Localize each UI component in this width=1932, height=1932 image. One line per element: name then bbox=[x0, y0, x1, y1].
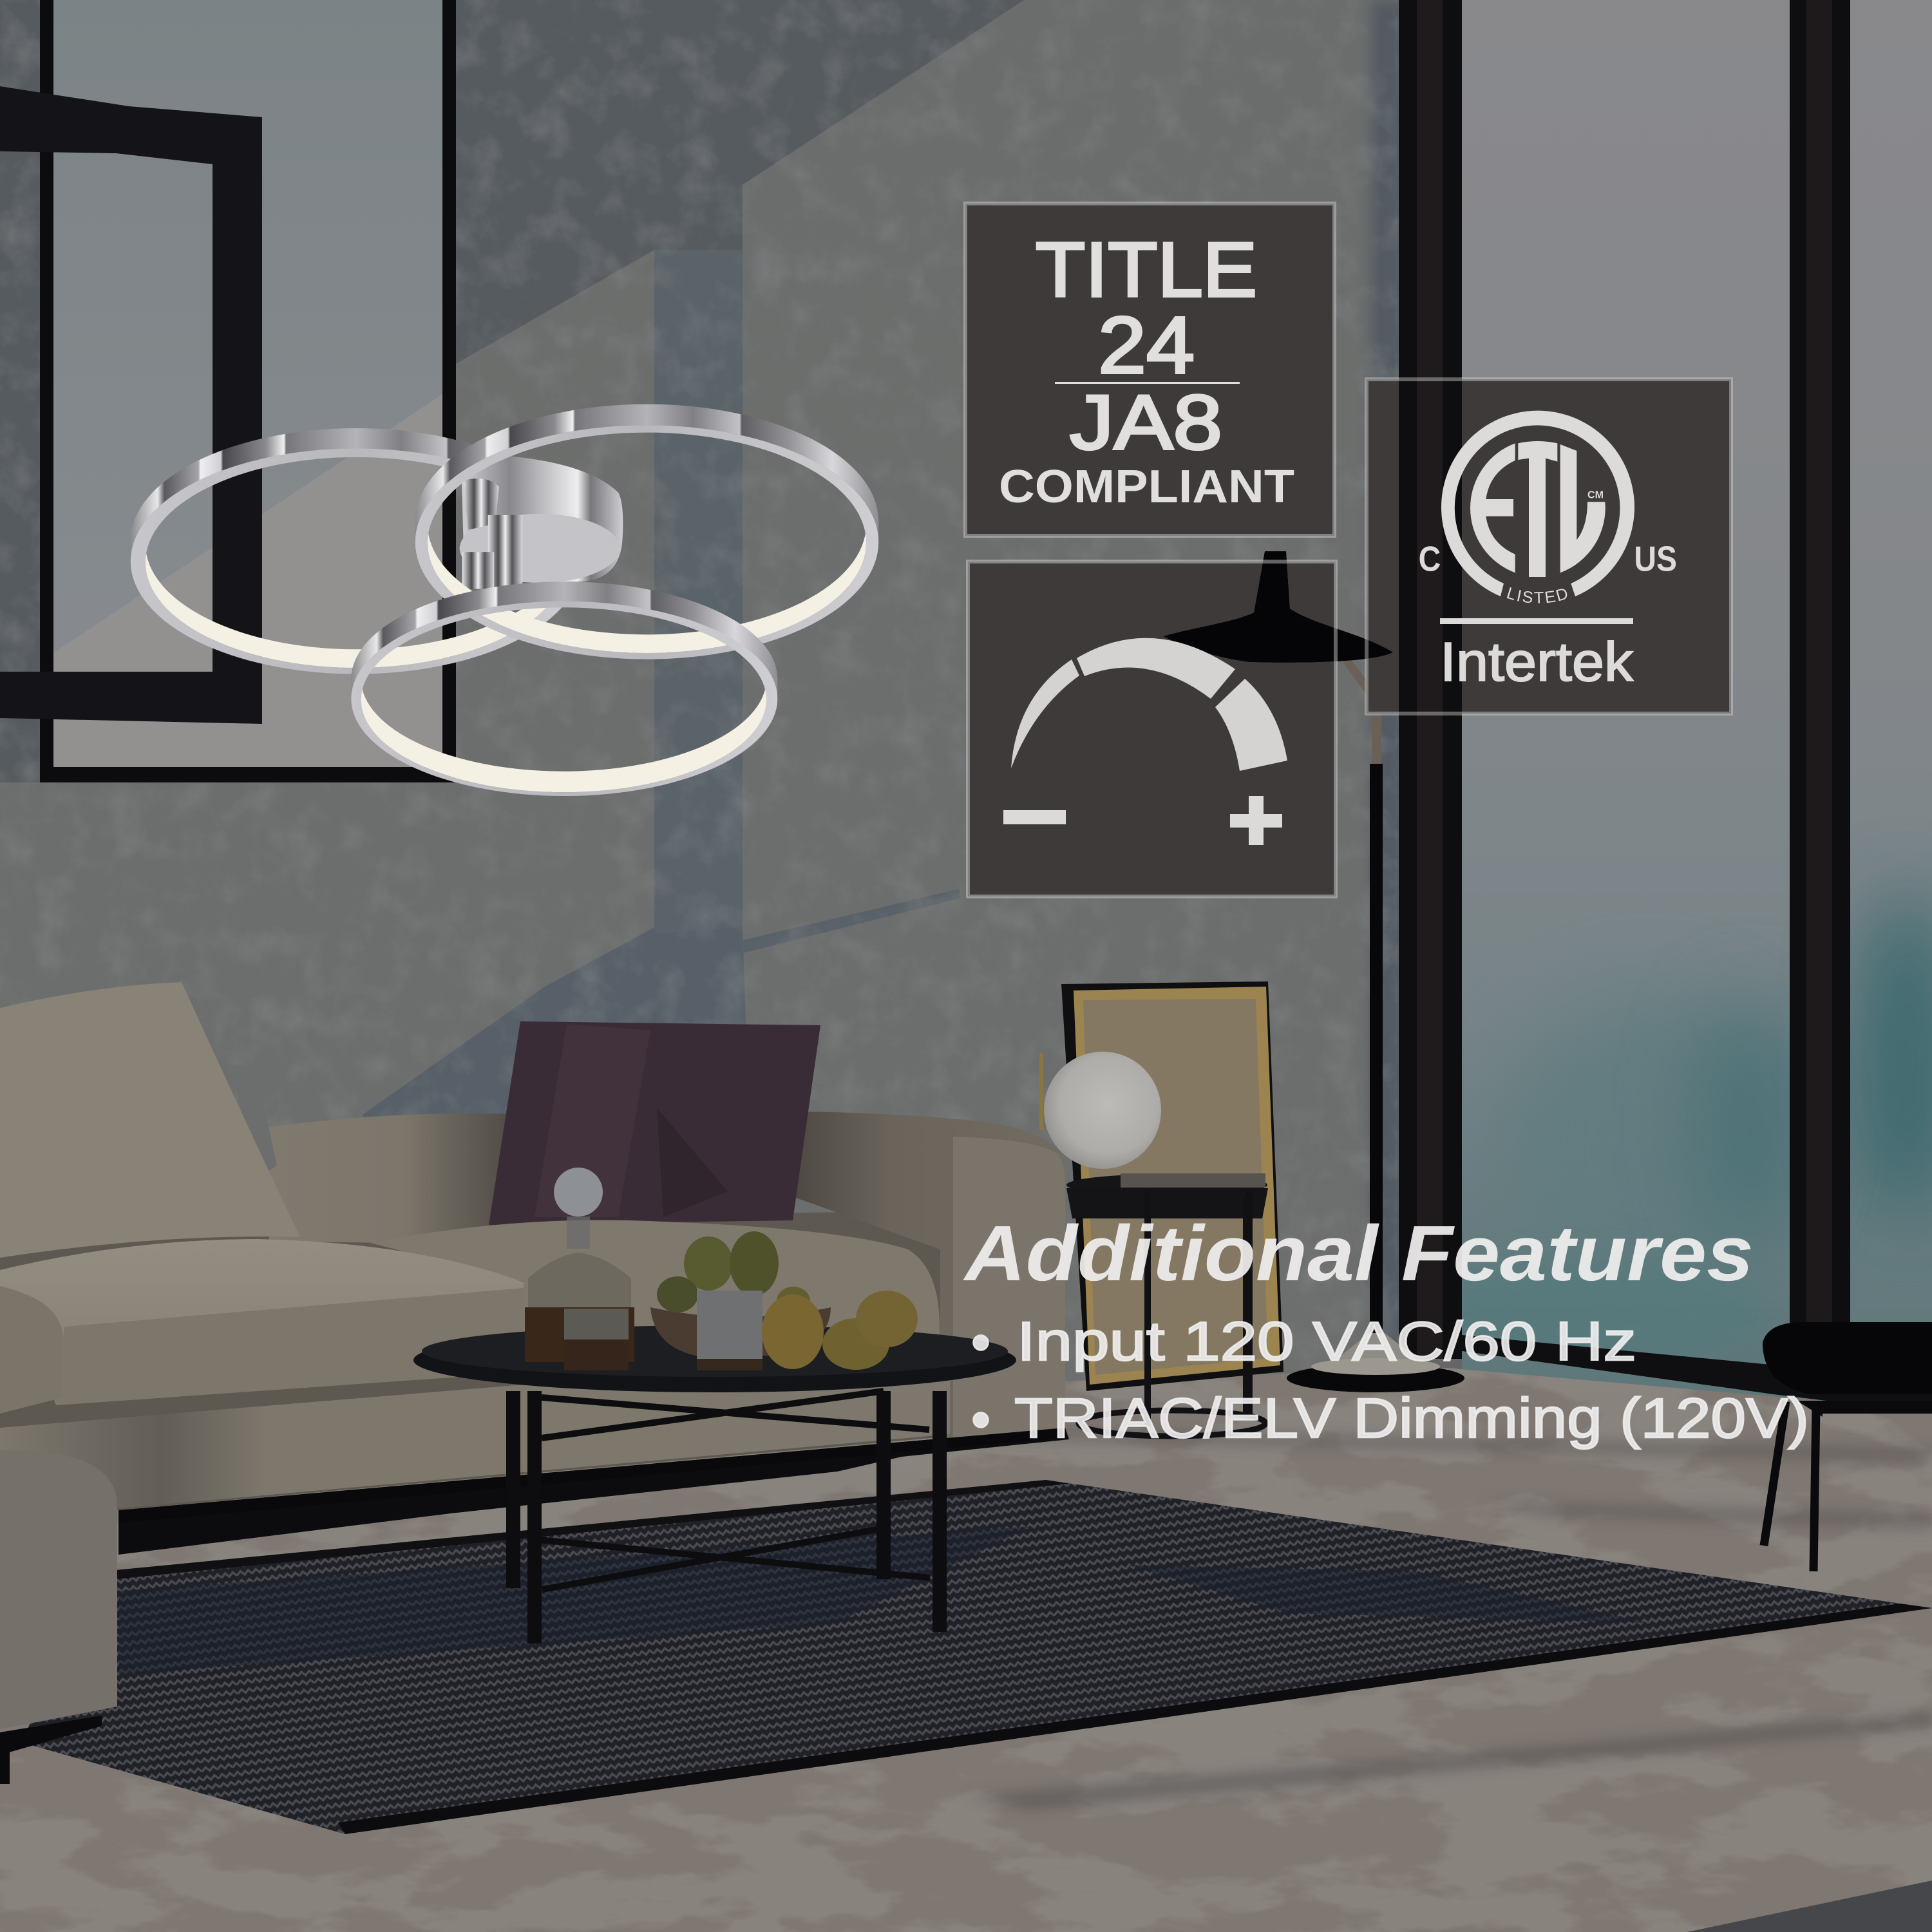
black rail bbox=[118, 1428, 1065, 1523]
icon: plus bbox=[1230, 796, 1282, 845]
sofa base bbox=[0, 1368, 950, 1508]
pears bbox=[657, 1231, 810, 1315]
large beige pillow bbox=[0, 982, 300, 1258]
heading: Additional Features: Additional Features bbox=[963, 1209, 1754, 1297]
rug bbox=[20, 1480, 1932, 1834]
badge text: TITLE: TITLE bbox=[1036, 227, 1257, 313]
badge text: COMPLIANT: COMPLIANT bbox=[999, 461, 1294, 513]
sofa bbox=[0, 982, 1069, 1784]
window panes with misty forest bbox=[1462, 0, 1932, 1401]
list item: dimming: TRIAC/ELV Dimming (120V) bbox=[1014, 1387, 1809, 1450]
chandelier: three chrome LED rings bbox=[131, 404, 878, 796]
leaning canvas bbox=[1061, 981, 1283, 1391]
left seat cushion bbox=[0, 1239, 524, 1405]
tray bbox=[413, 1325, 1016, 1392]
badge text: Intertek: Intertek bbox=[1440, 632, 1634, 693]
right seat cushion bbox=[370, 1220, 940, 1378]
panel: Title 24 JA8 compliant badge bbox=[965, 204, 1334, 536]
panel: dimmable badge bbox=[968, 562, 1336, 896]
icon: ETL logo: CM bbox=[1587, 489, 1604, 500]
icon: minus bbox=[1003, 810, 1066, 824]
small grey pillow bbox=[231, 1065, 277, 1179]
background: concrete wall bbox=[0, 0, 1417, 1481]
right arm bbox=[796, 1112, 1065, 1446]
list item: input: • bbox=[971, 1312, 990, 1373]
front-left arm bbox=[0, 1450, 117, 1784]
crystal glass bbox=[697, 1291, 762, 1370]
right arm front panel bbox=[953, 1137, 1065, 1443]
ceiling mount bbox=[460, 453, 623, 604]
sofa shadow underneath bbox=[118, 1428, 1069, 1555]
globe table lamp bbox=[1039, 1052, 1161, 1169]
icon: ETL logo: C bbox=[1419, 539, 1441, 579]
badge text: 24: 24 bbox=[1098, 301, 1195, 390]
coffee table bbox=[413, 1168, 1016, 1643]
icon: ETL logo: LISTED bbox=[1507, 587, 1567, 603]
window sill bbox=[1444, 1335, 1932, 1414]
purple pillow bbox=[489, 1021, 820, 1225]
icon: dimmer arc bbox=[1011, 638, 1287, 771]
ring: left bbox=[131, 428, 582, 674]
framed picture on wall bbox=[40, 0, 456, 782]
stool bbox=[1763, 1322, 1932, 1571]
ring: front bbox=[351, 582, 777, 796]
back cushions bbox=[269, 1113, 513, 1243]
table legs and cross bars bbox=[513, 1391, 940, 1643]
list item: input: Input 120 VAC/60 Hz bbox=[1017, 1311, 1636, 1372]
dark wood frame bbox=[0, 86, 262, 724]
window frame posts bbox=[1399, 0, 1850, 1378]
panel: ETL listed badge bbox=[1365, 377, 1733, 715]
decanter bbox=[525, 1168, 634, 1362]
badge text: JA8: JA8 bbox=[1070, 379, 1222, 466]
ring: right bbox=[415, 404, 878, 659]
far left cushion bbox=[0, 1286, 63, 1414]
fruit bowl bbox=[650, 1307, 831, 1356]
icon: ETL logo bbox=[1419, 411, 1677, 603]
sofa backing bbox=[0, 1211, 953, 1510]
pomegranates bbox=[762, 1291, 918, 1370]
side table bbox=[1066, 1173, 1268, 1436]
icon: ETL logo: US bbox=[1634, 539, 1677, 579]
floor lamp bbox=[1163, 551, 1464, 1392]
floor bbox=[0, 1352, 1932, 1932]
whisky glass bbox=[564, 1309, 629, 1370]
list item: dimming: • bbox=[971, 1389, 990, 1450]
